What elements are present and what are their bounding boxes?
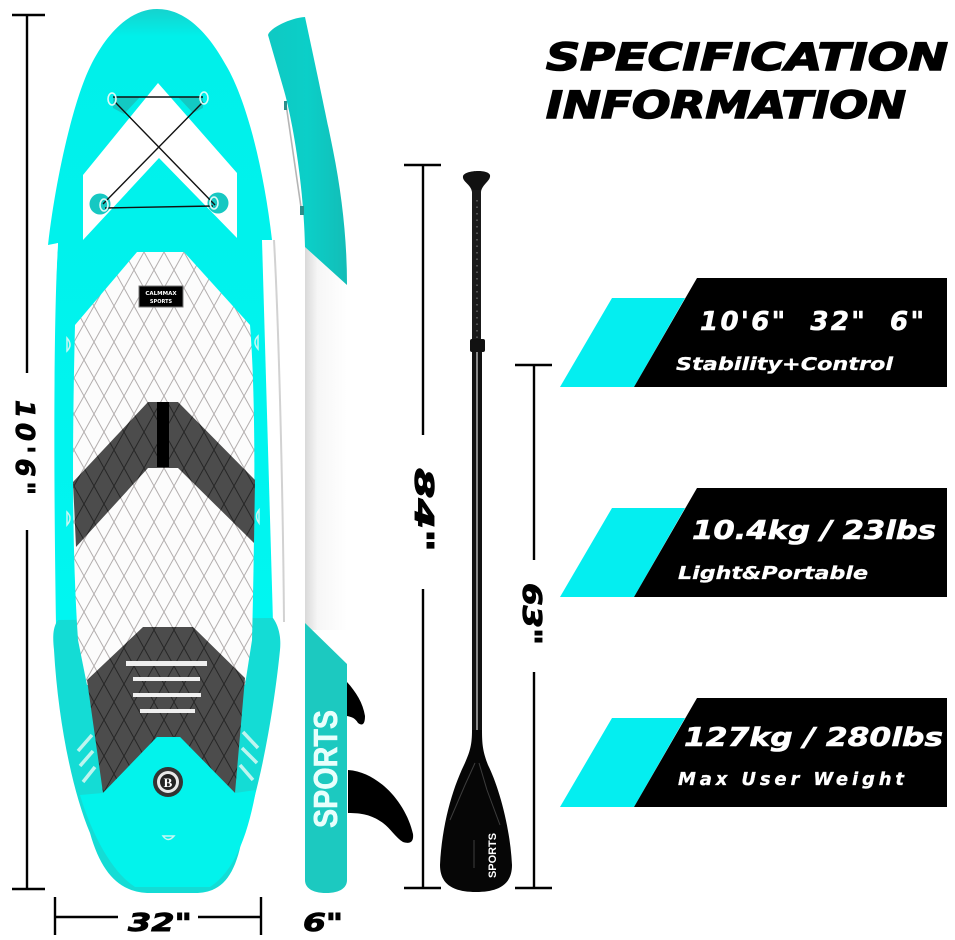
side nose — [268, 17, 347, 285]
dimension: board length 10'6": 10'6" — [9, 400, 39, 495]
top-view paddle board — [46, 9, 285, 893]
blade highlights — [450, 763, 500, 868]
tail kick — [53, 618, 280, 893]
nose chevron — [83, 83, 237, 240]
spec banner: weight — [560, 488, 947, 597]
sports side lettering: SPORTS — [307, 710, 344, 828]
spec banner: dimensions: 10'6" 32" 6" — [700, 307, 924, 337]
dimension: thickness 6": 6" — [303, 908, 343, 937]
dimension: paddle min 63" — [515, 365, 552, 888]
deck pad — [73, 252, 254, 685]
dimension: paddle min 63": 63" — [516, 583, 546, 645]
dimension: width 32" — [55, 897, 261, 937]
tail valve logo: B — [164, 775, 173, 790]
spec banner: weight: 10.4kg / 23lbs — [692, 516, 936, 546]
spec banner: dimensions — [560, 278, 947, 387]
spec banner: max user weight — [560, 698, 947, 807]
blade sports text: SPORTS — [487, 833, 499, 878]
side tail — [305, 623, 347, 893]
lower D-ring pads — [90, 192, 228, 214]
side handle — [284, 101, 304, 215]
dimension: paddle max 84": 84" — [408, 468, 438, 552]
title — [546, 36, 948, 127]
tail D-ring — [163, 836, 174, 840]
spec banner: max user weight: Max User Weight — [678, 769, 905, 790]
title: SPECIFICATION — [546, 36, 948, 79]
side D-rings — [67, 336, 259, 525]
shaft scale — [476, 200, 478, 338]
tail valve logo — [153, 767, 183, 797]
upper triangle shade — [113, 97, 203, 114]
dimension: board length 10'6" — [9, 15, 45, 889]
side stripes — [78, 732, 258, 782]
blade — [440, 730, 512, 892]
tail traction pad — [87, 627, 245, 793]
lower fin — [348, 770, 413, 843]
paddle — [440, 171, 512, 892]
right rail — [262, 240, 285, 622]
dimension: width 32": 32" — [128, 908, 192, 937]
brand label — [139, 286, 183, 307]
bungee cords — [103, 97, 215, 208]
spec banner: dimensions: Stability+Control — [676, 354, 894, 375]
right rail grey edge — [274, 240, 284, 622]
spec banner: max user weight: 127kg / 280lbs — [684, 723, 943, 753]
nose and body — [48, 9, 273, 625]
tail pad stripes — [126, 661, 207, 713]
bright tail area — [80, 737, 256, 887]
center chevron traction — [73, 402, 255, 547]
side white body — [305, 245, 347, 630]
brand label: CALMMAX — [145, 291, 177, 297]
lower shaft — [472, 352, 482, 737]
upper shaft — [472, 190, 481, 340]
brand label: SPORTS — [150, 299, 172, 305]
D-rings — [100, 92, 218, 211]
upper fin — [347, 682, 365, 725]
left notch — [46, 243, 58, 300]
clamp — [470, 339, 485, 352]
title: INFORMATION — [546, 84, 906, 127]
spec banner: weight: Light&Portable — [678, 563, 868, 584]
side-view board — [268, 17, 413, 893]
center carry handle — [157, 402, 169, 467]
paddle grip — [463, 171, 490, 192]
dimension: paddle max 84" — [404, 165, 441, 888]
